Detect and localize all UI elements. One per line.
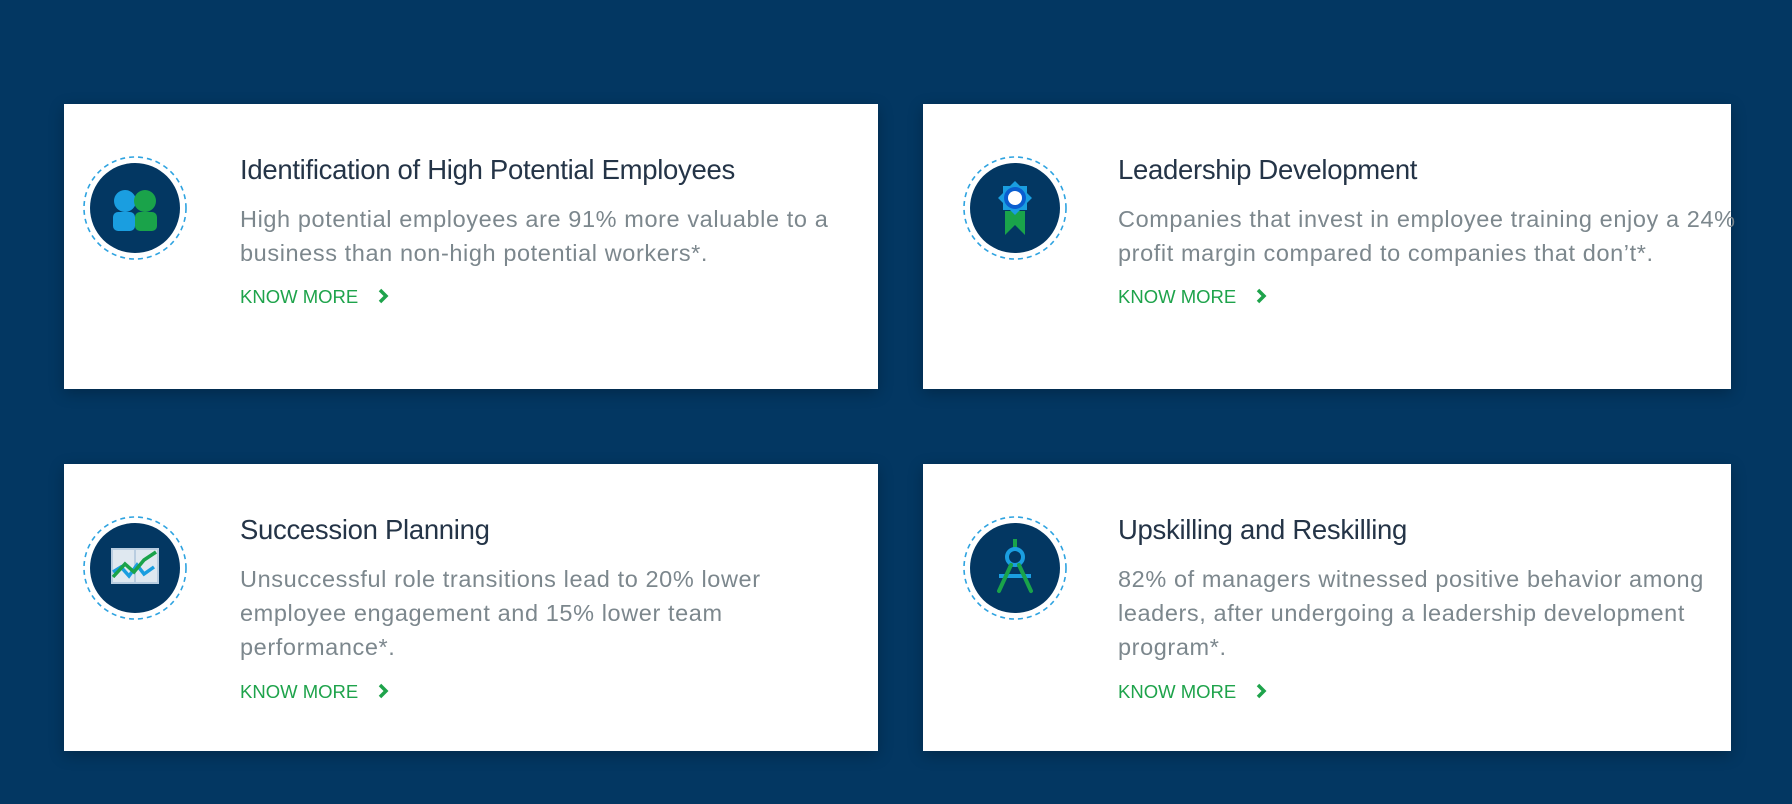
text: profit margin compared to companies that don’t*. — [1118, 240, 1654, 266]
title: Leadership Development — [1118, 154, 1417, 185]
text: High potential employees are 91% more valuable to a — [240, 206, 828, 232]
title: Identification of High Potential Employees — [240, 154, 735, 185]
text: performance*. — [240, 634, 395, 660]
text: program*. — [1118, 634, 1227, 660]
text — [240, 206, 828, 266]
title: Upskilling and Reskilling — [1118, 514, 1407, 545]
icon: compass — [963, 516, 1067, 620]
title: Succession Planning — [240, 514, 490, 545]
text — [1118, 206, 1736, 266]
link: KNOW MORE — [1118, 681, 1236, 702]
icon: people — [83, 156, 187, 260]
panel: upskilling — [923, 464, 1731, 751]
text: business than non-high potential workers*. — [240, 240, 708, 266]
link: KNOW MORE — [1118, 286, 1236, 307]
panel: succession — [64, 464, 878, 751]
text — [240, 566, 761, 660]
icon: badge — [963, 156, 1067, 260]
text: Unsuccessful role transitions lead to 20% lower — [240, 566, 761, 592]
link: KNOW MORE — [240, 286, 358, 307]
text: leaders, after undergoing a leadership development — [1118, 600, 1685, 626]
icon: chart — [83, 516, 187, 620]
panel: leadership — [923, 104, 1731, 389]
text: Companies that invest in employee training enjoy a 24% — [1118, 206, 1736, 232]
text — [1118, 566, 1704, 660]
link: KNOW MORE — [240, 681, 358, 702]
text: employee engagement and 15% lower team — [240, 600, 723, 626]
text: 82% of managers witnessed positive behavior among — [1118, 566, 1704, 592]
panel: identification — [64, 104, 878, 389]
